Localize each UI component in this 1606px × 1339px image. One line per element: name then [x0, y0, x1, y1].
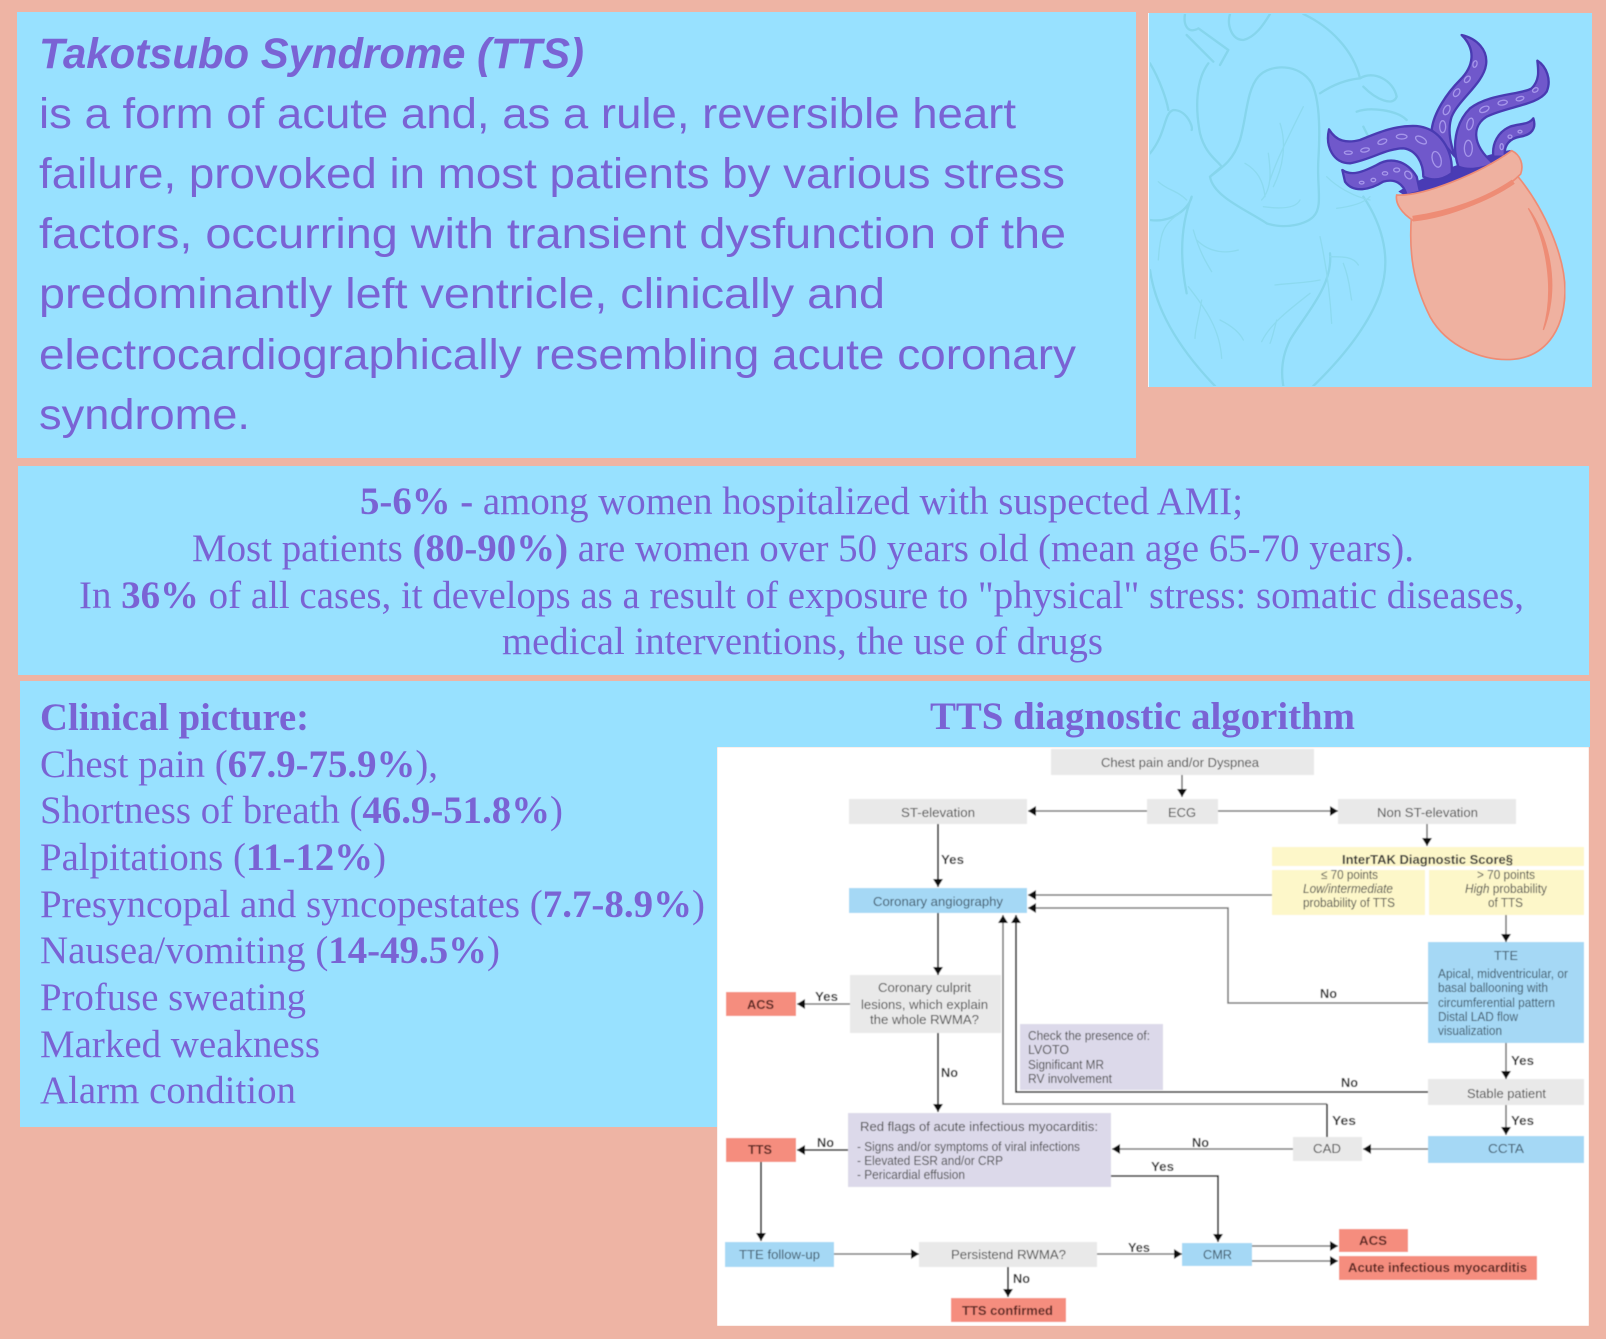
box: InterTAK score [1272, 847, 1584, 915]
icon: faint heart outline [1150, 14, 1407, 386]
definition text: electrocardiographically resembling acute coronary [39, 331, 1077, 379]
box: coronary culprit lesions: the whole RWMA? [870, 1012, 979, 1027]
flowchart arrows [761, 775, 1506, 1297]
list: symptoms [40, 743, 705, 1112]
box: red flags: - Pericardial effusion [857, 1167, 965, 1182]
box: check presence: Check the presence of: [1028, 1028, 1150, 1043]
branch labels: No [1192, 1135, 1209, 1150]
branch labels: No [1013, 1271, 1030, 1286]
box: coronary angiography: Coronary angiography [873, 894, 1003, 909]
box: TTE [1428, 942, 1584, 1043]
branch labels [815, 852, 1534, 1286]
box: persistent RWMA [919, 1242, 1097, 1267]
box: stable patient [1428, 1079, 1584, 1105]
box: red flags: - Elevated ESR and/or CRP [857, 1153, 1003, 1168]
box: Non ST-elevation: Non ST-elevation [1377, 805, 1478, 820]
illustration: heart with octopus pot [1148, 13, 1592, 387]
panel: diagnostic algorithm [717, 681, 1590, 1326]
branch labels: No [1320, 986, 1337, 1001]
icon: takotsubo pot with tentacles [1328, 35, 1565, 360]
panel: definition [17, 12, 1136, 458]
box: chest pain [1051, 749, 1314, 775]
box: coronary angiography [849, 888, 1027, 913]
box: ACS outcome: ACS [747, 997, 774, 1012]
heading: Takotsubo Syndrome: Takotsubo Syndrome (TTS) [39, 30, 584, 78]
definition text: predominantly left ventricle, clinically and [39, 270, 885, 318]
branch labels: Yes [1128, 1240, 1150, 1255]
list: symptoms: Presyncopal and syncopestates (7.7-8.9%) [40, 883, 705, 926]
list: symptoms: Marked weakness [40, 1023, 320, 1066]
text: prevalence statistics: 5-6% - among women hospitalized with suspected AMI; [360, 480, 1243, 523]
branch labels: No [941, 1065, 958, 1080]
list: symptoms: Nausea/vomiting (14-49.5%) [40, 929, 500, 972]
box: TTE: TTE [1494, 948, 1518, 963]
box: ECG [1147, 799, 1218, 824]
box: ACS result [1339, 1229, 1408, 1252]
box: TTE: circumferential pattern [1438, 995, 1555, 1010]
box: ACS outcome [726, 992, 796, 1016]
box: CAD [1293, 1137, 1362, 1161]
box: acute infectious myocarditis [1339, 1256, 1537, 1280]
box: CCTA: CCTA [1488, 1141, 1524, 1156]
box: TTS confirmed [951, 1298, 1066, 1322]
panel: clinical picture [20, 681, 717, 1127]
box: InterTAK score: probability of TTS [1303, 895, 1395, 910]
box: chest pain: Chest pain and/or Dyspnea [1101, 755, 1260, 770]
box: acute infectious myocarditis: Acute infectious myocarditis [1348, 1260, 1527, 1275]
box: check presence: RV involvement [1028, 1071, 1112, 1086]
branch labels: Yes [815, 989, 838, 1004]
box: ST-elevation [849, 799, 1027, 824]
box: red flags: - Signs and/or symptoms of viral infections [857, 1139, 1080, 1154]
flowchart [717, 747, 1589, 1326]
text: prevalence statistics: In 36% of all cases, it develops as a result of exposure to "physical" stress: somatic diseases, [79, 574, 1524, 617]
box: TTE: Apical, midventricular, or [1438, 966, 1569, 981]
box: stable patient: Stable patient [1467, 1086, 1546, 1101]
box: persistent RWMA: Persistend RWMA? [951, 1247, 1066, 1262]
branch labels: Yes [1151, 1159, 1174, 1174]
box: coronary culprit lesions: lesions, which explain [861, 997, 988, 1012]
definition text: is a form of acute and, as a rule, reversible heart [39, 90, 1016, 138]
box: check presence [1020, 1024, 1163, 1090]
list: symptoms: Profuse sweating [40, 976, 306, 1019]
box: InterTAK score: ≤ 70 points [1321, 867, 1378, 882]
box: CMR [1182, 1243, 1252, 1266]
box: InterTAK score: of TTS [1488, 895, 1523, 910]
box: InterTAK score: InterTAK Diagnostic Score§ [1342, 852, 1513, 867]
box: Non ST-elevation [1338, 799, 1516, 824]
box: TTS confirmed: TTS confirmed [962, 1303, 1053, 1318]
box: coronary culprit lesions: Coronary culprit [878, 980, 971, 995]
branch labels: No [817, 1135, 834, 1150]
box: InterTAK score: Low/intermediate [1303, 881, 1393, 896]
list: symptoms: Shortness of breath (46.9-51.8%) [40, 789, 563, 832]
list: symptoms: Alarm condition [40, 1069, 296, 1112]
box: check presence: LVOTO [1028, 1042, 1069, 1057]
box: red flags [848, 1113, 1111, 1187]
branch labels: Yes [941, 852, 964, 867]
definition text: syndrome. [39, 391, 250, 439]
text: prevalence statistics: Most patients (80-90%) are women over 50 years old (mean age 65-70 years). [192, 527, 1414, 570]
list: symptoms: Chest pain (67.9-75.9%), [40, 743, 438, 786]
definition text: failure, provoked in most patients by various stress [39, 150, 1065, 198]
box: CAD: CAD [1313, 1141, 1341, 1156]
definition text [39, 90, 1077, 439]
branch labels: Yes [1511, 1053, 1534, 1068]
box: InterTAK score: High probability [1465, 881, 1547, 896]
definition text: factors, occurring with transient dysfunction of the [39, 210, 1066, 258]
text: prevalence statistics: medical interventions, the use of drugs [502, 620, 1103, 663]
list: symptoms: Palpitations (11-12%) [40, 836, 386, 879]
branch labels: Yes [1332, 1113, 1356, 1128]
box: TTS: TTS [748, 1142, 772, 1157]
box: coronary culprit lesions [850, 975, 1001, 1033]
box: check presence: Significant MR [1028, 1057, 1104, 1072]
heading: TTS diagnostic algorithm: TTS diagnostic algorithm [930, 695, 1355, 738]
box: TTE: Distal LAD flow [1438, 1009, 1519, 1024]
box: TTS [726, 1138, 796, 1162]
branch labels: No [1341, 1075, 1358, 1090]
box: ACS result: ACS [1359, 1233, 1387, 1248]
panel: epidemiology [18, 466, 1589, 675]
box: ST-elevation: ST-elevation [901, 805, 975, 820]
box: InterTAK score: > 70 points [1477, 867, 1535, 882]
heading: clinical picture: Clinical picture: [40, 696, 309, 739]
box: red flags: Red flags of acute infectious myocarditis: [860, 1119, 1098, 1134]
box: ECG: ECG [1168, 805, 1196, 820]
box: TTE follow-up [725, 1242, 834, 1267]
box: TTE follow-up: TTE follow-up [739, 1247, 820, 1262]
text: prevalence statistics [79, 480, 1524, 663]
box: CCTA [1428, 1136, 1584, 1163]
box: CMR: CMR [1203, 1247, 1232, 1262]
box: TTE: basal ballooning with [1438, 980, 1548, 995]
box: TTE: visualization [1438, 1023, 1502, 1038]
branch labels: Yes [1511, 1113, 1534, 1128]
